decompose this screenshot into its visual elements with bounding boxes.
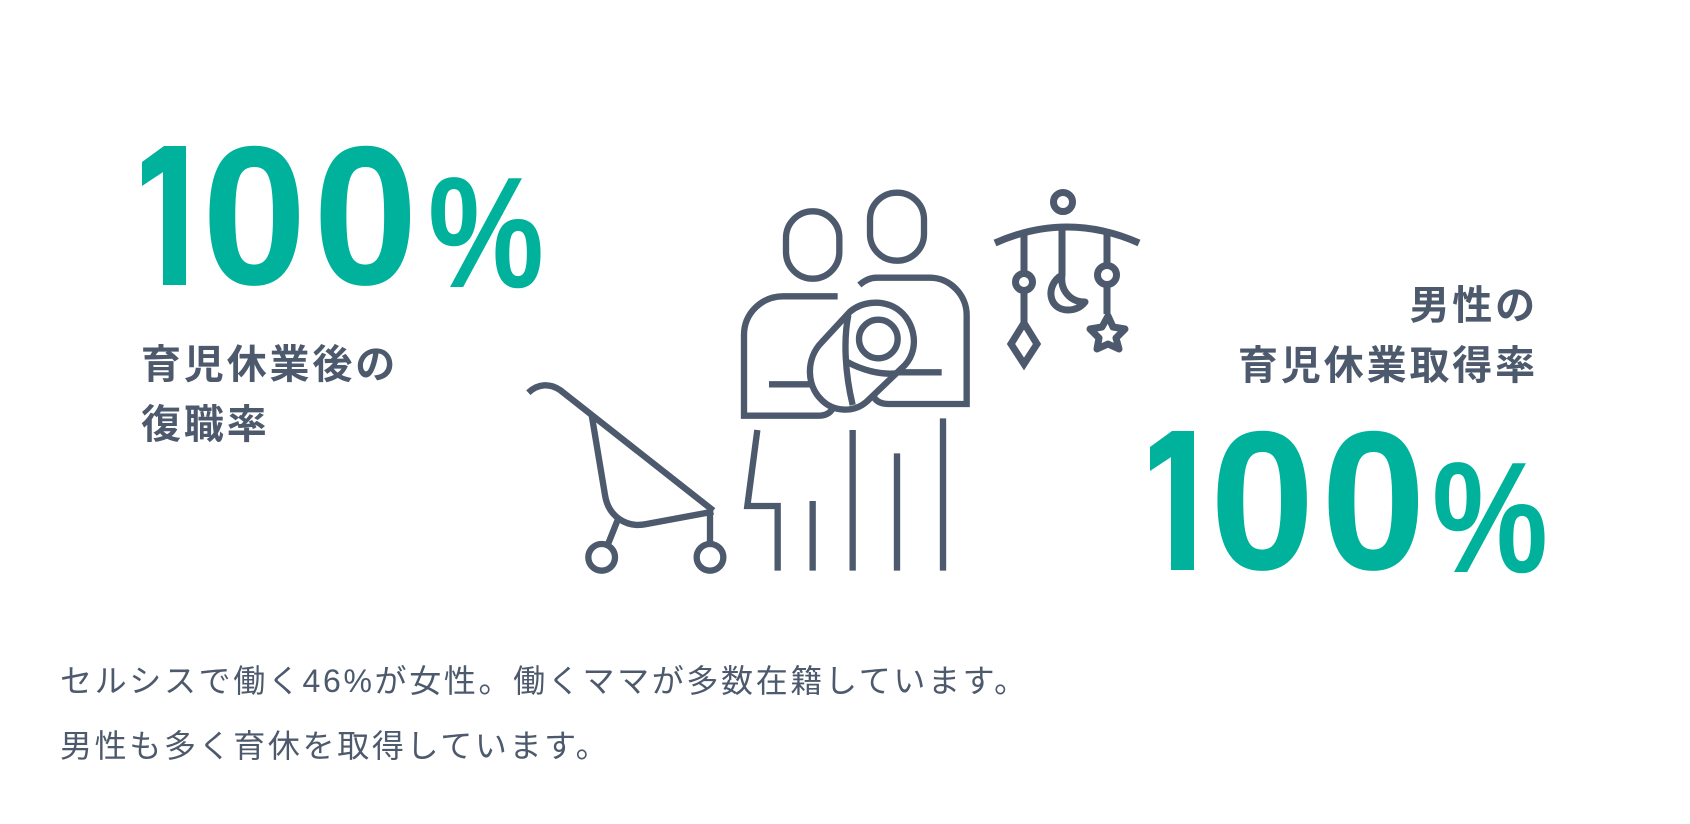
- text block: description: セルシスで働く46%が女性。働くママが多数在籍しています。: [60, 663, 1029, 699]
- text block: description: [60, 663, 1029, 764]
- icon: stroller: [528, 385, 723, 571]
- label: return to work rate: [141, 343, 398, 447]
- icon: baby mobile: [994, 189, 1140, 370]
- label: male childcare leave rate: 育児休業取得率: [1238, 344, 1538, 388]
- label: return to work rate: 復職率: [141, 403, 270, 447]
- icon: father: [859, 193, 967, 571]
- stat: return to work rate 100%: [142, 130, 544, 300]
- label: return to work rate: 育児休業後の: [141, 343, 398, 387]
- icon: mother: [744, 211, 853, 571]
- text block: description: 男性も多く育休を取得しています。: [60, 728, 610, 764]
- label: male childcare leave rate: [1238, 284, 1538, 388]
- label: male childcare leave rate: 男性の: [1409, 284, 1538, 328]
- stat: male childcare leave rate 100%: [1150, 415, 1548, 585]
- icon: baby: [810, 303, 914, 410]
- illustration: family with baby and stroller: [526, 190, 970, 574]
